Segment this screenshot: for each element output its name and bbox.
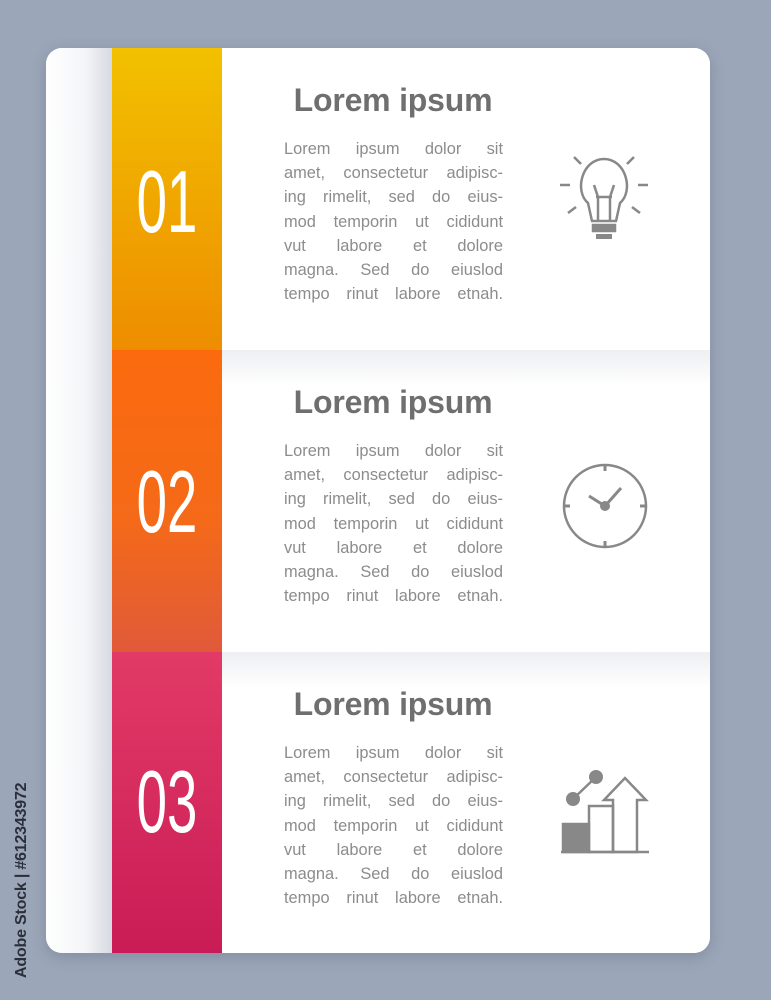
section 3	[222, 652, 710, 954]
text 1: amet, consectetur adipisc-	[284, 164, 503, 182]
text 2: Lorem ipsum dolor sit	[284, 442, 503, 460]
text 1: vut labore et dolore	[284, 237, 503, 255]
text 1: ing rimelit, sed do eius-	[284, 188, 503, 206]
text 2: magna. Sed do eiuslod	[284, 563, 503, 581]
text 3: tempo rinut labore etnah.	[284, 889, 503, 907]
text 1: magna. Sed do eiuslod	[284, 261, 503, 279]
text 3: ing rimelit, sed do eius-	[284, 792, 503, 810]
bar 01: 01	[137, 152, 197, 251]
heading 3: Lorem ipsum	[294, 686, 492, 722]
left strip	[46, 48, 112, 953]
section 2	[222, 350, 710, 652]
bar 02: 02	[137, 452, 197, 551]
text 3: amet, consectetur adipisc-	[284, 768, 503, 786]
text 1: mod temporin ut cididunt	[284, 213, 503, 231]
text 3: magna. Sed do eiuslod	[284, 865, 503, 883]
section 1	[222, 48, 710, 350]
text 3: vut labore et dolore	[284, 841, 503, 859]
heading 1: Lorem ipsum	[294, 82, 492, 118]
bar 03	[112, 652, 222, 954]
text 2: vut labore et dolore	[284, 539, 503, 557]
icon: light bulb	[560, 156, 648, 239]
text 3: Lorem ipsum dolor sit	[284, 744, 503, 762]
bar 03: 03	[137, 752, 197, 851]
text 1: Lorem ipsum dolor sit	[284, 140, 503, 158]
icon: clock	[562, 464, 648, 548]
heading 2: Lorem ipsum	[294, 384, 492, 420]
text 2	[284, 442, 503, 605]
icon: growth chart	[561, 770, 649, 854]
text 2: tempo rinut labore etnah.	[284, 587, 503, 605]
text 2: amet, consectetur adipisc-	[284, 466, 503, 484]
text 3	[284, 744, 503, 907]
text 2: ing rimelit, sed do eius-	[284, 490, 503, 508]
text 2: mod temporin ut cididunt	[284, 515, 503, 533]
bar 02	[112, 350, 222, 652]
bar 01	[112, 48, 222, 350]
text 1: tempo rinut labore etnah.	[284, 285, 503, 303]
credit text: Adobe Stock | #612343972	[13, 783, 30, 978]
text 3: mod temporin ut cididunt	[284, 817, 503, 835]
card	[46, 48, 710, 953]
text 1	[284, 140, 503, 303]
